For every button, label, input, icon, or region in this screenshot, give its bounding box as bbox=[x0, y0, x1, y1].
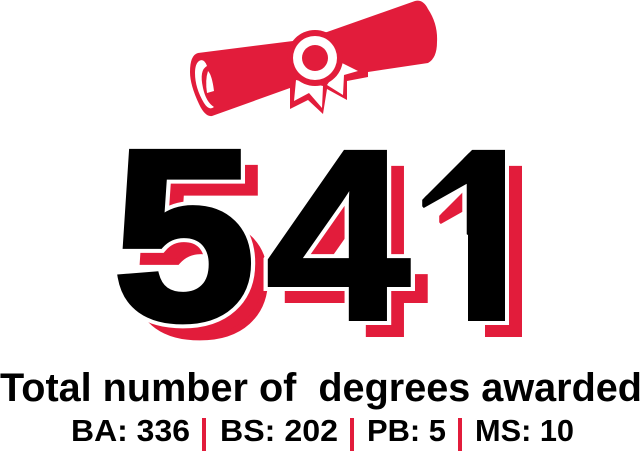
red shadow bbox=[140, 164, 522, 340]
white outline: 4 bbox=[266, 100, 410, 371]
degree breakdown bbox=[71, 413, 574, 451]
BS count: BS: 202 bbox=[220, 413, 338, 448]
white outline bbox=[140, 164, 509, 328]
red shadow: 4 bbox=[283, 116, 427, 387]
MS count: MS: 10 bbox=[475, 413, 574, 448]
separator bbox=[202, 418, 206, 451]
red shadow: 5 bbox=[130, 116, 272, 387]
white outline: 1 bbox=[406, 100, 556, 371]
BA count: BA: 336 bbox=[71, 413, 190, 448]
PB count: PB: 5 bbox=[367, 413, 446, 448]
scroll end curl bbox=[195, 60, 214, 108]
black digits: 5 bbox=[113, 100, 255, 371]
white outline: 5 bbox=[113, 100, 255, 371]
black digits: 1 bbox=[406, 100, 556, 371]
ribbon tails bbox=[294, 63, 358, 108]
red shadow: 1 bbox=[423, 116, 573, 387]
medal bbox=[287, 30, 343, 86]
heading: Total number of degrees awarded bbox=[0, 366, 642, 410]
separator bbox=[350, 418, 354, 451]
big number 541 bbox=[117, 148, 522, 340]
black digits: 4 bbox=[266, 100, 410, 371]
separator bbox=[458, 418, 462, 451]
black digits bbox=[117, 148, 505, 324]
icon: diploma scroll with ribbon bbox=[190, 1, 437, 116]
